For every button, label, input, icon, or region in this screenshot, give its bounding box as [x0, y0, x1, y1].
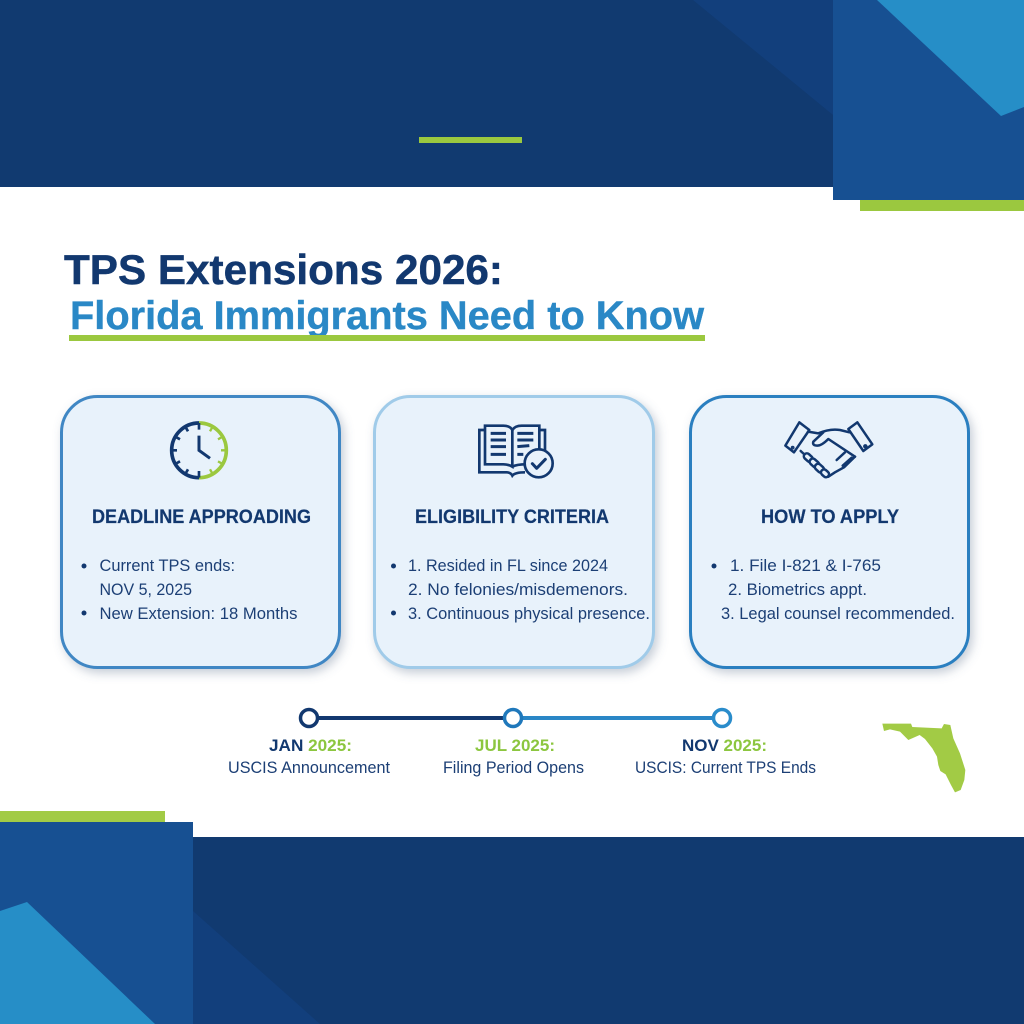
text: apply list: 2. Biometrics appt.: [728, 581, 867, 599]
text: deadline list: New Extension: 18 Months: [100, 605, 298, 623]
icon: book with check: [479, 426, 553, 477]
milestone: July: [443, 737, 584, 777]
milestone: November: [635, 737, 816, 777]
panel: deadline approaching: [62, 396, 340, 668]
text: deadline list: Current TPS ends:: [100, 557, 235, 575]
text: deadline list: [82, 557, 298, 623]
milestone: November: NOV 2025:: [682, 737, 767, 755]
title: TPS Extensions 2026:: [64, 246, 503, 293]
text: eligibility list: 1. Resided in FL since 2024: [408, 557, 608, 575]
text: apply list: 3. Legal counsel recommended.: [721, 605, 955, 623]
milestone: July: Filing Period Opens: [443, 759, 584, 777]
timeline: [228, 710, 816, 777]
title: [64, 246, 705, 341]
panel: eligibility criteria: [374, 396, 654, 668]
milestone: January: JAN 2025:: [269, 737, 352, 755]
text: eligibility list: [391, 557, 650, 623]
icon: clock: [172, 423, 226, 478]
milestone: January: USCIS Announcement: [228, 759, 390, 777]
milestone: November: USCIS: Current TPS Ends: [635, 759, 816, 777]
text: apply list: [712, 557, 955, 623]
title: Florida Immigrants Need to Know: [70, 294, 705, 338]
heading: eligibility: ELIGIBILITY CRITERIA: [415, 507, 609, 528]
top banner: [0, 0, 1024, 211]
milestone: July: JUL 2025:: [475, 737, 555, 755]
text: deadline list: NOV 5, 2025: [100, 581, 192, 599]
text: eligibility list: 2. No felonies/misdemenors.: [408, 581, 628, 599]
text: apply list: 1. File I-821 & I-765: [730, 557, 881, 575]
heading: deadline: DEADLINE APPROADING: [92, 507, 311, 528]
panel: how to apply: [690, 396, 968, 668]
icon: Florida map: [882, 724, 965, 792]
heading: how to apply: HOW TO APPLY: [761, 507, 899, 528]
milestone: January: [228, 737, 390, 777]
icon: handshake: [785, 422, 872, 478]
text: eligibility list: 3. Continuous physical presence.: [408, 605, 650, 623]
bottom banner: [0, 811, 1024, 1024]
